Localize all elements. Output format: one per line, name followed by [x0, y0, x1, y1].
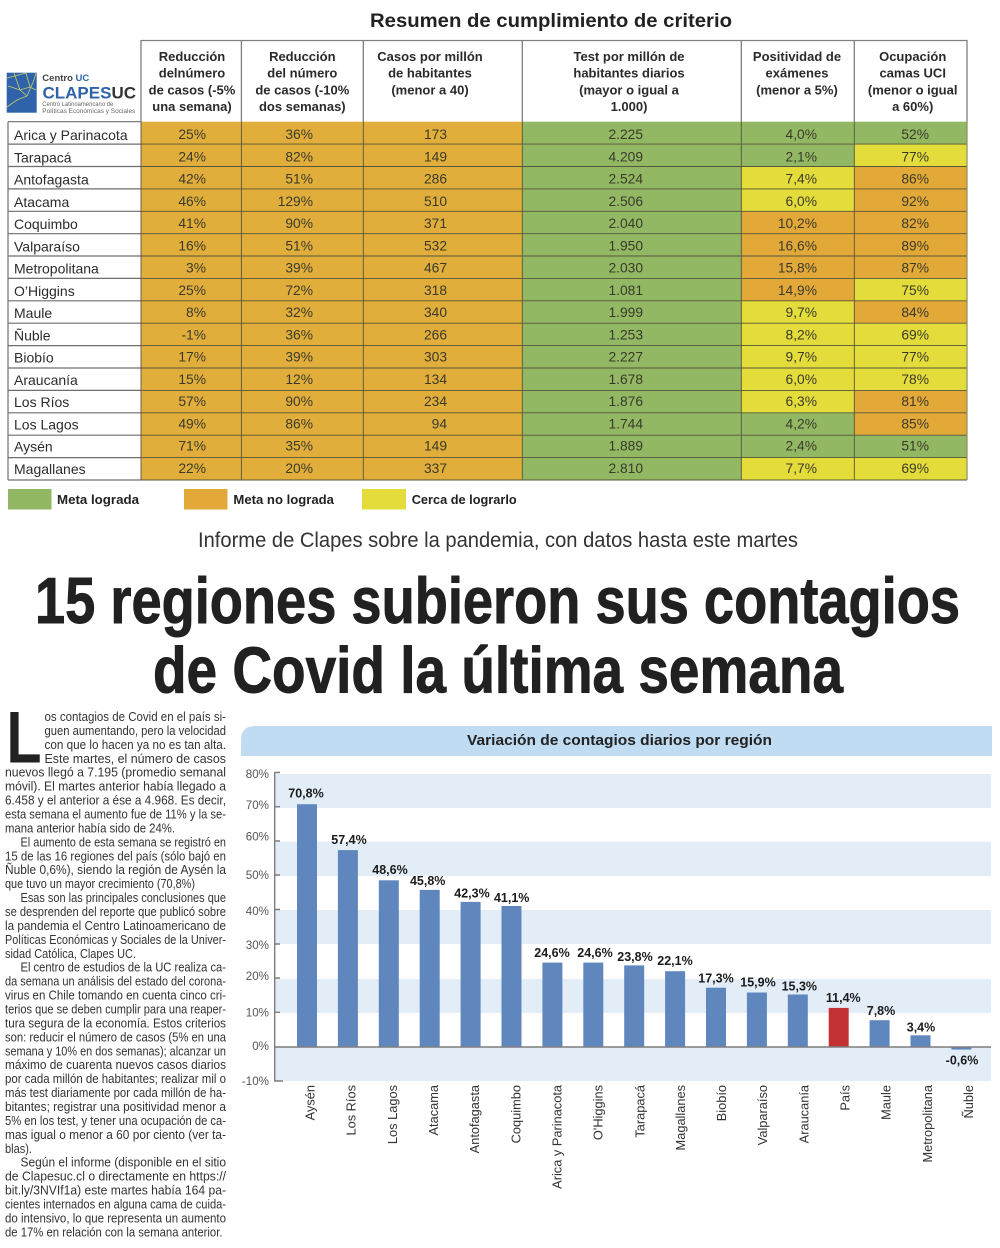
article text: semana y 10% en dos semanas); alcanzar un [5, 1044, 226, 1058]
region axis labels: O'Higgins [591, 1085, 606, 1140]
row: Los Ríos: Los Ríos [14, 394, 69, 410]
table header: exámenes [766, 66, 828, 81]
legend [8, 489, 517, 510]
table header: 1.000) [611, 99, 647, 114]
region axis labels: Atacama [426, 1084, 441, 1136]
row: Metropolitana: 467 [424, 260, 447, 276]
region axis labels: Aysén [302, 1085, 318, 1120]
row: Araucanía: 134 [424, 372, 447, 387]
row: Los Ríos: 81% [901, 394, 929, 409]
row: Los Lagos: 1.744 [608, 416, 643, 431]
row: Ñuble: 69% [901, 327, 929, 342]
y axis: 80% [246, 768, 269, 781]
row: Biobío: 2.227 [608, 350, 643, 364]
row: Ñuble: 8,2% [786, 327, 817, 342]
y axis: 60% [246, 831, 269, 844]
row: Valparaíso: Valparaíso [14, 238, 80, 254]
table header: Reducción [269, 49, 336, 64]
table header: (mayor o igual a [579, 82, 680, 97]
bar value labels: 15,3% [782, 980, 817, 994]
row: Antofagasta: 86% [901, 172, 929, 186]
row: Coquimbo: 10,2% [778, 216, 817, 231]
row: Aysén: 2,4% [786, 438, 817, 454]
row: Antofagasta: 51% [285, 172, 313, 186]
table header: (menor o igual [868, 82, 957, 97]
row: O'Higgins [14, 278, 967, 301]
bar value labels: 48,6% [372, 863, 408, 877]
table header: Ocupación [879, 49, 946, 64]
row: Antofagasta: 7,4% [786, 172, 817, 186]
row: Biobío: 17% [178, 350, 206, 364]
headline: de Covid la última semana [153, 634, 844, 706]
bar chart: variación de contagios [242, 768, 991, 1189]
row: Magallanes: Magallanes [14, 461, 86, 477]
bar value labels: 23,8% [617, 950, 653, 964]
article text: esta semana el aumento fue de 11% y la se- [5, 808, 226, 822]
row: O'Higgins: 1.081 [608, 283, 643, 298]
bar value labels: 41,1% [494, 891, 529, 905]
row: Araucanía [14, 368, 967, 390]
article text: El aumento de esta semana se registró en [20, 835, 226, 849]
row: Valparaíso: 1.950 [608, 238, 643, 253]
row: Coquimbo: Coquimbo [14, 216, 78, 232]
row: Araucanía: 12% [285, 372, 313, 387]
drop cap: L [6, 696, 42, 779]
region axis labels: Antofagasta [467, 1084, 482, 1153]
article text: son: reducir el número de casos (5% en una [5, 1030, 226, 1044]
article text: guen aumentando, pero la velocidad [44, 724, 226, 738]
row: Los Lagos: 86% [285, 416, 313, 431]
bar value labels: 7,8% [867, 1004, 895, 1018]
row: Los Lagos: 49% [178, 416, 206, 431]
row: Antofagasta: Antofagasta [14, 172, 89, 188]
row: Ñuble [14, 323, 967, 346]
row: Arica y Parinacota: 4,0% [786, 127, 817, 142]
y axis: 20% [246, 970, 269, 983]
y axis [242, 768, 283, 1088]
logo: Clapes UC: Centro Latinoamericano de [42, 101, 113, 108]
row: Los Ríos: 57% [178, 394, 206, 409]
chart title bar [241, 726, 992, 756]
logo: Clapes UC: CLAPESUC [42, 83, 136, 102]
table header [141, 40, 967, 122]
row: Antofagasta: 42% [178, 172, 206, 186]
article text: Esas son las principales conclusiones que [20, 891, 226, 905]
row: Coquimbo: 82% [901, 216, 929, 231]
row: Valparaíso: 16,6% [778, 238, 817, 253]
article text: 15 de las 16 regiones del país (sólo bajó en [5, 849, 226, 863]
row: Coquimbo [14, 211, 967, 234]
row: Los Lagos: 4,2% [786, 416, 817, 431]
row: Coquimbo: 371 [424, 216, 447, 231]
region axis labels: Maule [879, 1085, 894, 1120]
article text: El centro de estudios de la UC realiza ca- [20, 961, 226, 975]
article text: blas). [5, 1142, 32, 1156]
article text: la pandemia el Centro Latinoamericano de [5, 919, 226, 933]
row: Arica y Parinacota: 25% [178, 127, 206, 142]
region axis labels: Biobío [714, 1085, 729, 1121]
region axis labels: Valparaíso [755, 1085, 770, 1145]
y axis: 30% [246, 939, 269, 952]
row: Antofagasta [14, 166, 967, 189]
table header: (menor a 40) [391, 82, 469, 97]
y axis: 70% [246, 799, 269, 812]
logo: Clapes UC: Políticas Económicas y Sociales [42, 108, 136, 115]
region axis labels: Coquimbo [508, 1085, 523, 1143]
row: Ñuble: -1% [181, 327, 206, 342]
row: Atacama: 92% [901, 194, 929, 209]
article text: tura segura de la economía. Estos criterios [5, 1016, 226, 1030]
y axis: 10% [246, 1007, 269, 1020]
region axis labels: Arica y Parinacota [549, 1084, 564, 1189]
article text: 5% en los test, y tener una ocupación de ca- [5, 1114, 226, 1128]
row: Ñuble: 36% [285, 327, 313, 342]
row: Biobío: 9,7% [786, 350, 817, 364]
row: Atacama: 46% [178, 194, 206, 209]
row: O'Higgins: 14,9% [778, 283, 817, 298]
kicker: Informe de Clapes sobre la pandemia, con datos hasta este martes [198, 529, 798, 552]
article text: con que lo hacen ya no es tan alta. [44, 738, 226, 752]
article text: mana anterior había sido de 24%. [5, 821, 175, 835]
article text: Según el informe (disponible en el sitio [20, 1156, 226, 1170]
row: Metropolitana: Metropolitana [14, 260, 99, 276]
row: Magallanes: 20% [285, 461, 313, 476]
row: Los Lagos: Los Lagos [14, 416, 79, 432]
table header: (menor a 5%) [756, 82, 838, 97]
row: Los Ríos: 90% [285, 394, 313, 409]
row: Tarapacá: 149 [424, 149, 447, 164]
article text: da semana un análisis del estado del corona- [5, 975, 226, 989]
row: Magallanes: 69% [901, 461, 929, 476]
row: Maule [14, 301, 967, 323]
row: Arica y Parinacota [14, 122, 967, 144]
row: Tarapacá: 4.209 [608, 149, 643, 164]
region axis labels: Araucanía [796, 1084, 811, 1143]
row: Los Lagos: 85% [901, 416, 929, 431]
row: Araucanía: 78% [901, 372, 929, 387]
row: Metropolitana: 2.030 [608, 260, 643, 276]
bar value labels: 57,4% [331, 833, 367, 847]
row: Tarapacá: Tarapacá [14, 149, 72, 165]
logo: Clapes UC [7, 73, 136, 115]
row: Arica y Parinacota: Arica y Parinacota [14, 127, 128, 143]
row: Maule: 8% [186, 305, 206, 320]
legend: Meta no lograda [233, 492, 335, 507]
bar value labels [288, 787, 978, 1068]
row: Arica y Parinacota: 52% [901, 127, 929, 142]
row: Los Ríos: 1.876 [608, 394, 643, 409]
row: Aysén: 71% [178, 438, 206, 454]
bar value labels: 17,3% [698, 972, 734, 986]
bar value labels: 15,9% [740, 976, 776, 990]
row: Coquimbo: 90% [285, 216, 313, 231]
bar value labels: 24,6% [577, 946, 613, 960]
table header: habitantes diarios [573, 66, 685, 81]
row: Valparaíso: 532 [424, 238, 447, 253]
row: Araucanía: 6,0% [786, 372, 817, 387]
row: Valparaíso: 16% [178, 238, 206, 253]
row: Atacama: Atacama [14, 194, 69, 210]
article text: nuevos llegó a 7.195 (promedio semanal [5, 766, 226, 780]
y axis: 50% [246, 869, 269, 882]
row: O'Higgins: 25% [178, 283, 206, 298]
row: Tarapacá [14, 144, 967, 166]
row: Metropolitana [14, 256, 967, 278]
row: Los Ríos [14, 390, 967, 413]
article text: bit.ly/3NVIf1a) este martes había 164 pa- [5, 1184, 226, 1198]
region axis labels: Los Lagos [385, 1085, 400, 1144]
row: Tarapacá: 2,1% [786, 149, 817, 164]
article text: por cada millón de habitantes; realizar mil o [5, 1072, 226, 1086]
row: Magallanes: 22% [178, 461, 206, 476]
row: Atacama: 129% [278, 194, 313, 209]
row: Coquimbo: 41% [178, 216, 206, 231]
table header: Reducción [159, 49, 225, 64]
row: Tarapacá: 82% [285, 149, 313, 164]
bar value labels: 42,3% [454, 887, 490, 901]
row: Aysén: Aysén [14, 438, 53, 454]
article text: Políticas Económicas y Sociales de la Univer- [5, 933, 226, 947]
bar value labels: 70,8% [288, 787, 324, 801]
region axis labels [302, 1084, 976, 1189]
table header: Positividad de [753, 49, 841, 64]
region axis labels: Los Ríos [344, 1085, 359, 1136]
row: Metropolitana: 3% [186, 260, 206, 276]
row: Biobío: 77% [901, 350, 929, 364]
row: Los Ríos: 6,3% [786, 394, 817, 409]
row: Los Lagos [14, 413, 967, 435]
y axis: -10% [242, 1075, 269, 1088]
legend: Cerca de lograrlo [412, 492, 517, 507]
row: Coquimbo: 2.040 [608, 216, 643, 231]
row: O'Higgins: 75% [901, 283, 929, 298]
row: Maule: 9,7% [786, 305, 817, 320]
row: Biobío: Biobío [14, 350, 54, 366]
table header: Casos por millón [377, 49, 483, 64]
bar value labels: 45,8% [410, 874, 445, 888]
row: Metropolitana: 39% [285, 260, 313, 276]
table header: de casos (-5% [149, 82, 236, 97]
article text: máximo de cuarenta nuevos casos diarios [5, 1058, 226, 1072]
row: Maule: 84% [901, 305, 929, 320]
row: Valparaíso: 89% [901, 238, 929, 253]
bar value labels: -0,6% [946, 1054, 978, 1068]
row: Atacama: 6,0% [786, 194, 817, 209]
article text: Ñuble 0,6%), siendo la región de Aysén la [5, 863, 226, 877]
chart title bar: Variación de contagios diarios por región [467, 732, 772, 749]
row: Araucanía: 15% [178, 372, 206, 387]
bar value labels: 22,1% [657, 954, 693, 968]
article text: do intensivo, lo que representa un aumento [5, 1212, 226, 1226]
row: Ñuble: 266 [424, 327, 447, 342]
article text: de Clapesuc.cl o directamente en https:// [5, 1170, 227, 1184]
bars [297, 804, 971, 1050]
row: Maule: 340 [424, 305, 447, 320]
row: Aysén: 51% [901, 438, 929, 454]
region axis labels: País [838, 1085, 852, 1111]
table header: camas UCI [879, 66, 946, 81]
table header: a 60%) [892, 99, 933, 114]
article text: virus en Chile tomando en cuenta cinco cri- [5, 989, 226, 1003]
row: Atacama: 2.506 [608, 194, 643, 209]
row: Tarapacá: 77% [901, 149, 929, 164]
row: O'Higgins: O’Higgins [14, 283, 75, 299]
table header: una semana) [152, 99, 232, 114]
row: Maule: 1.999 [608, 305, 643, 320]
article text: Este martes, el número de casos [44, 752, 226, 766]
row: Magallanes: 2.810 [608, 461, 643, 476]
row: Antofagasta: 286 [424, 172, 447, 186]
article text: más test diariamente por cada millón de ha- [5, 1086, 226, 1100]
row: Araucanía: Araucanía [14, 372, 78, 388]
row: Magallanes: 337 [424, 461, 447, 476]
row: Arica y Parinacota: 2.225 [608, 127, 643, 142]
row: Araucanía: 1.678 [608, 372, 643, 387]
row: Tarapacá: 24% [178, 149, 206, 164]
article text: 6.458 y el anterior a ése a 4.968. Es decir, [5, 794, 226, 808]
region axis labels: Metropolitana [920, 1084, 935, 1163]
row: Valparaíso [14, 234, 967, 256]
table header: Test por millón de [574, 49, 684, 64]
row: Aysén [14, 435, 967, 458]
bar value labels: 11,4% [826, 991, 861, 1005]
table header: del número [267, 66, 337, 81]
row: Ñuble: Ñuble [14, 327, 51, 343]
row: Metropolitana: 87% [901, 260, 929, 276]
row: Biobío: 39% [285, 350, 313, 364]
region axis labels: Tarapacá [633, 1084, 648, 1138]
row: Maule: 32% [285, 305, 313, 320]
row: Arica y Parinacota: 36% [285, 127, 313, 142]
table header: de habitantes [388, 66, 472, 81]
article text: terios que se deben cumplir para una reaper- [5, 1002, 226, 1016]
row: Atacama [14, 189, 967, 211]
row: O'Higgins: 318 [424, 283, 447, 298]
table header: dos semanas) [259, 99, 346, 114]
row: Ñuble: 1.253 [608, 327, 643, 342]
logo: Clapes UC: Centro UC [42, 73, 89, 84]
row: O'Higgins: 72% [285, 283, 313, 298]
article text: sidad Católica, Clapes UC. [5, 947, 136, 961]
table header: de casos (-10% [255, 82, 350, 97]
row: Aysén: 149 [424, 438, 447, 454]
article text: os contagios de Covid en el país si- [44, 710, 226, 724]
article text: que tuvo un mayor crecimiento (70,8%) [5, 877, 195, 891]
article text: de 17% en relación con la semana anterior. [5, 1225, 222, 1239]
row: Magallanes: 7,7% [786, 461, 817, 476]
row: Los Lagos: 94 [432, 416, 447, 431]
region axis labels: Ñuble [961, 1085, 976, 1118]
y axis: 40% [246, 905, 269, 918]
row: Antofagasta: 2.524 [608, 172, 643, 186]
article text: mas igual o menor a 60 por ciento (ver ta- [5, 1128, 226, 1142]
row: Maule: Maule [14, 305, 52, 321]
row: Los Ríos: 234 [424, 394, 447, 409]
bar value labels: 24,6% [534, 946, 570, 960]
article text: móvil). El martes anterior había llegado a [5, 780, 226, 794]
y axis: 0% [252, 1040, 269, 1053]
region axis labels: Magallanes [673, 1085, 688, 1150]
legend: Meta lograda [57, 492, 140, 507]
table header: delnúmero [159, 66, 225, 81]
bar value labels: 3,4% [907, 1021, 935, 1035]
row: Arica y Parinacota: 173 [424, 127, 447, 142]
row: Magallanes [14, 458, 967, 480]
row: Aysén: 1.889 [608, 438, 643, 454]
article text: se desprenden del reporte que publicó sobre [5, 905, 226, 919]
article text [5, 710, 227, 1239]
row: Atacama: 510 [424, 194, 447, 209]
headline [35, 564, 960, 706]
row: Valparaíso: 51% [285, 238, 313, 253]
article text: bitantes; registrar una positividad menor a [5, 1100, 226, 1114]
row: Aysén: 35% [285, 438, 313, 454]
table title: Resumen de cumplimiento de criterio [370, 10, 732, 32]
row: Biobío [14, 346, 967, 368]
row: Biobío: 303 [424, 350, 447, 364]
article text: cientes internados en alguna cama de cuida- [5, 1198, 226, 1212]
row: Metropolitana: 15,8% [778, 260, 817, 276]
